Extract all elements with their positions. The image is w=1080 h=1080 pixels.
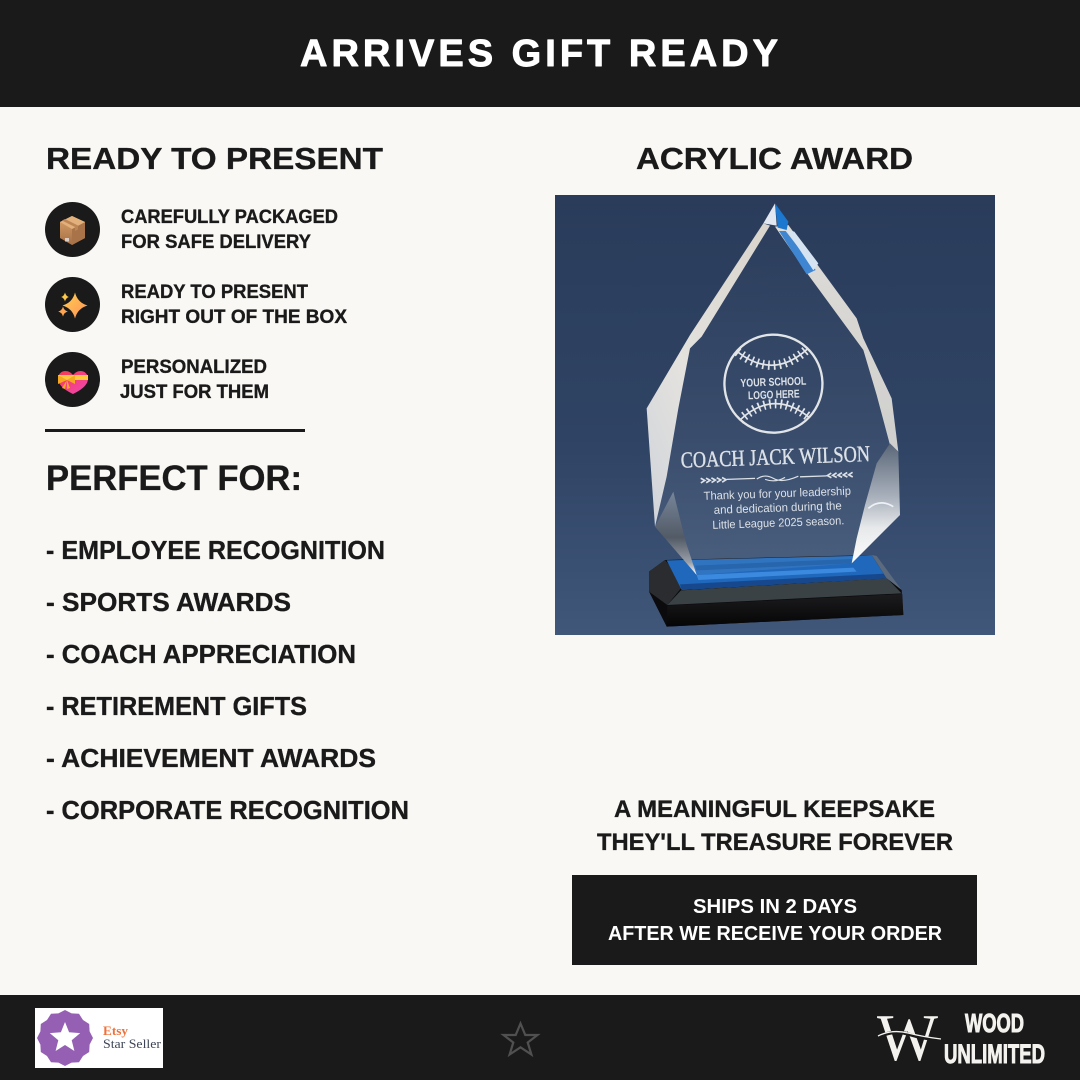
text: carefully packaged: FOR SAFE DELIVERY: [121, 232, 311, 253]
tagline: [597, 796, 953, 856]
left facets: [647, 223, 770, 527]
engraving: [676, 331, 872, 533]
shipping callout: SHIPS IN 2 DAYS: [693, 896, 857, 918]
icon: heart with ribbon: [45, 352, 100, 407]
baseball logo: LOGO HERE: [748, 388, 800, 402]
list: perfect for: - COACH APPRECIATION: [46, 641, 356, 669]
text: personalized: JUST FOR THEM: [120, 382, 269, 403]
award glass body: [647, 203, 900, 575]
text: carefully packaged: CAREFULLY PACKAGED: [121, 207, 338, 228]
icon: package box: [45, 202, 100, 257]
badge: etsy star seller: [35, 1008, 163, 1068]
engraving: Thank you for your leadership: [703, 485, 851, 503]
heading: perfect for: PERFECT FOR:: [46, 459, 302, 498]
text: personalized: PERSONALIZED: [121, 357, 267, 378]
list: perfect for: - CORPORATE RECOGNITION: [46, 797, 409, 825]
list: perfect for: - RETIREMENT GIFTS: [46, 693, 307, 721]
shipping callout: AFTER WE RECEIVE YOUR ORDER: [608, 923, 943, 945]
list: perfect for: [46, 537, 409, 825]
logo: wood unlimited: W: [877, 1001, 939, 1075]
icon: purple star seal: [37, 1010, 93, 1066]
baseball logo: [723, 333, 824, 434]
engraving: Little League 2025 season.: [712, 514, 844, 532]
list: perfect for: - SPORTS AWARDS: [46, 589, 291, 617]
baseball logo: YOUR SCHOOL: [740, 376, 807, 390]
badge: etsy star seller: Etsy: [103, 1024, 129, 1038]
logo: wood unlimited: WOOD: [965, 1008, 1024, 1038]
icon: sparkles: [45, 277, 100, 332]
shipping callout: [572, 875, 977, 965]
tagline: THEY'LL TREASURE FOREVER: [597, 829, 953, 856]
text: carefully packaged: [121, 207, 338, 253]
award base: [649, 555, 903, 627]
feature: ready to present: [45, 277, 347, 332]
text: ready to present: READY TO PRESENT: [121, 282, 308, 303]
feature: personalized: [45, 352, 269, 407]
engraving: and dedication during the: [714, 499, 842, 517]
footer bar: [0, 995, 1080, 1080]
heading: ready to present: READY TO PRESENT: [46, 141, 383, 176]
text: personalized: [120, 357, 269, 403]
engraving: COACH JACK WILSON: [680, 441, 870, 473]
list: perfect for: - ACHIEVEMENT AWARDS: [46, 745, 376, 773]
tagline: A MEANINGFUL KEEPSAKE: [614, 796, 935, 823]
icon: outline star: [504, 1024, 538, 1054]
title: ARRIVES GIFT READY: [300, 33, 778, 75]
text: ready to present: [121, 282, 347, 328]
text: ready to present: RIGHT OUT OF THE BOX: [121, 307, 347, 328]
header banner: [0, 0, 1080, 107]
badge: etsy star seller: Star Seller: [103, 1037, 162, 1051]
list: perfect for: - EMPLOYEE RECOGNITION: [46, 537, 385, 565]
product photo: acrylic award: [555, 195, 995, 635]
feature: carefully packaged: [45, 202, 338, 257]
right facets: [775, 225, 898, 452]
logo: wood unlimited: [877, 1001, 1045, 1075]
top tip: [763, 203, 777, 226]
heading: acrylic award: ACRYLIC AWARD: [636, 141, 913, 176]
